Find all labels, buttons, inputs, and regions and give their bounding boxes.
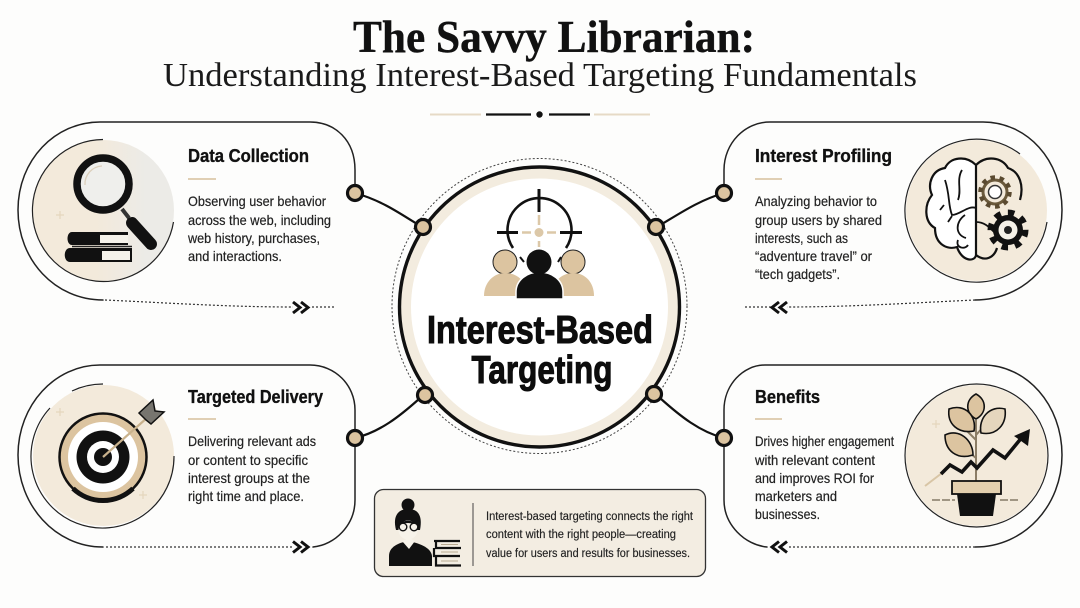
icon: target with arrow: [31, 384, 174, 528]
panel outline: data collection: [18, 122, 355, 313]
text: targeted delivery: or content to specific: [188, 452, 308, 468]
heading: hub label: Targeting: [472, 349, 612, 392]
icon: brain and gears: [905, 139, 1047, 282]
icon: plant with growth arrow: [905, 384, 1048, 527]
text: targeted delivery: Delivering relevant ads: [188, 433, 316, 449]
text: targeted delivery: interest groups at the: [188, 470, 310, 486]
heading: interest profiling: Interest Profiling: [755, 146, 892, 166]
text: interest profiling: [755, 193, 882, 282]
connector nodes: [348, 186, 732, 446]
text: benefits: Drives higher engagement: [755, 433, 894, 449]
heading: data collection: Data Collection: [188, 146, 309, 166]
hub circle: [406, 173, 674, 441]
dotted ring: [392, 158, 687, 454]
text: benefits: [754, 433, 894, 522]
text: interest profiling: Analyzing behavior to: [755, 193, 877, 209]
text: benefits: marketers and: [755, 488, 837, 504]
panel: benefits: [724, 365, 1062, 552]
heading: targeted delivery: Targeted Delivery: [188, 387, 323, 407]
text: callout: Interest-based targeting connects the right: [486, 511, 694, 523]
text: interest profiling: interests, such as: [755, 230, 848, 246]
text: data collection: web history, purchases,: [187, 230, 320, 246]
heading: hub label: Interest-Based: [427, 309, 653, 352]
text: targeted delivery: [188, 433, 316, 504]
callout: summary: [374, 490, 706, 576]
panel: central hub: [392, 158, 687, 454]
panel outline: targeted delivery: [18, 365, 355, 552]
text: interest profiling: group users by shared: [755, 212, 882, 228]
text: data collection: Observing user behavior: [188, 193, 326, 209]
panel: interest profiling: [724, 122, 1062, 313]
text: data collection: across the web, including: [188, 212, 331, 228]
text: benefits: businesses.: [755, 506, 820, 522]
text: targeted delivery: right time and place.: [188, 488, 304, 504]
text: benefits: and improves ROI for: [755, 470, 874, 486]
text: data collection: [187, 193, 331, 264]
heading: benefits: Benefits: [755, 387, 820, 407]
text: callout: content with the right people—creating: [486, 529, 676, 541]
text: callout: value for users and results for businesses.: [486, 548, 690, 560]
icon: magnifier and books: [32, 140, 174, 281]
panel: targeted delivery: [18, 365, 355, 552]
panel outline: interest profiling: [724, 122, 1062, 313]
title: Understanding Interest-Based Targeting Fundamentals: [163, 57, 917, 94]
text: callout: [486, 511, 694, 560]
text: data collection: and interactions.: [188, 248, 282, 264]
icon: librarian with books: [389, 498, 461, 566]
panel: data collection: [18, 122, 355, 313]
text: interest profiling: “adventure travel” or: [755, 248, 872, 264]
icon: crosshair over audience: [484, 189, 594, 299]
panel outline: benefits: [724, 365, 1062, 552]
title: [163, 12, 917, 94]
heading: hub label: [427, 309, 653, 392]
text: benefits: with relevant content: [754, 452, 875, 468]
connector lines: [355, 193, 724, 438]
title: The Savvy Librarian:: [353, 12, 755, 62]
text: interest profiling: “tech gadgets”.: [755, 266, 840, 282]
